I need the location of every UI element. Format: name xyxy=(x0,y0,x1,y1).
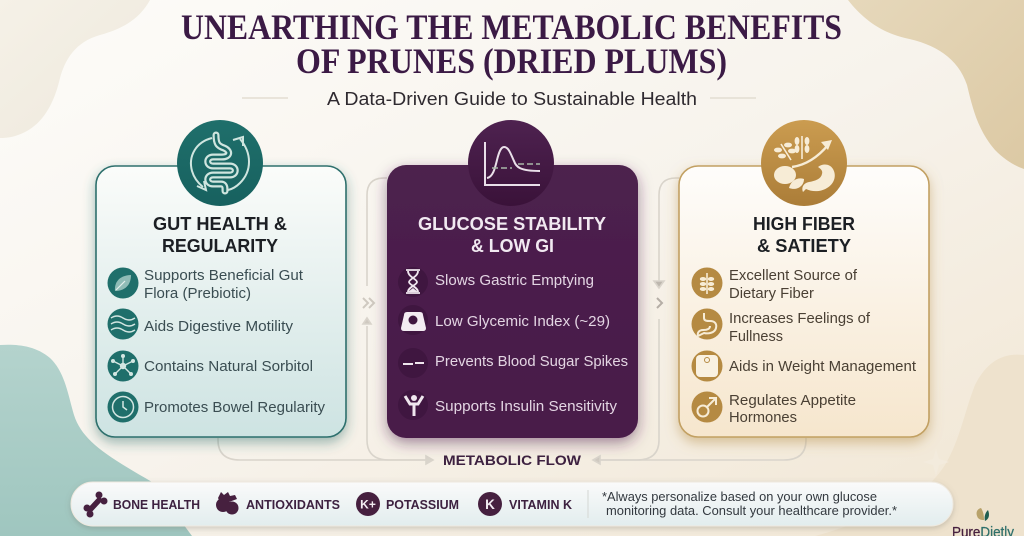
potassium: POTASSIUM xyxy=(386,497,459,512)
item: glycemic index xyxy=(398,305,610,335)
item: appetite hormones: Regulates Appetite xyxy=(729,393,856,409)
panel: gut health xyxy=(96,120,346,437)
title xyxy=(181,7,842,81)
item: blood sugar spikes xyxy=(398,348,628,378)
item: sorbitol xyxy=(108,350,313,382)
subtitle: A Data-Driven Guide to Sustainable Health xyxy=(327,88,697,109)
item: weight management xyxy=(692,350,916,382)
heading: GUT HEALTH & xyxy=(153,213,287,234)
item: gastric emptying xyxy=(398,267,594,297)
antioxidants: ANTIOXIDANTS xyxy=(246,497,340,512)
vitamin k: K xyxy=(485,497,495,512)
heading xyxy=(153,213,287,256)
item: appetite hormones: Hormones xyxy=(729,410,797,426)
item: blood sugar spikes: Prevents Blood Sugar Spikes xyxy=(435,354,628,370)
heading: REGULARITY xyxy=(162,235,279,256)
icon: glucose curve xyxy=(468,120,554,206)
disclaimer note: monitoring data. Consult your healthcare provider.* xyxy=(606,504,897,518)
item: motility: Aids Digestive Motility xyxy=(144,319,294,335)
panel: high fiber xyxy=(679,120,929,437)
icon: fiber and stomach xyxy=(761,120,847,206)
item: insulin sensitivity xyxy=(398,390,618,420)
item: glycemic index: Low Glycemic Index (~29) xyxy=(435,314,610,330)
heading: & LOW GI xyxy=(471,235,554,256)
potassium: K+ xyxy=(360,498,376,512)
item: fullness: Increases Feelings of xyxy=(729,311,871,327)
item: dietary fiber: Dietary Fiber xyxy=(729,286,814,302)
potassium xyxy=(356,492,459,516)
item: regularity: Promotes Bowel Regularity xyxy=(144,400,326,416)
item: gut flora: Supports Beneficial Gut xyxy=(144,268,303,284)
item: sorbitol: Contains Natural Sorbitol xyxy=(144,359,313,375)
item: weight management: Aids in Weight Management xyxy=(729,359,916,375)
heading: GLUCOSE STABILITY xyxy=(418,213,607,234)
item: motility xyxy=(108,308,294,340)
heading: & SATIETY xyxy=(757,235,852,256)
icon: gut xyxy=(177,120,263,206)
bone health: BONE HEALTH xyxy=(113,497,200,512)
item: fullness: Fullness xyxy=(729,329,783,345)
disclaimer note: *Always personalize based on your own glucose xyxy=(602,490,877,504)
metabolic flow connectors xyxy=(218,178,806,464)
item: gastric emptying: Slows Gastric Emptying xyxy=(435,273,594,289)
vitamin k: VITAMIN K xyxy=(509,497,573,512)
item: regularity xyxy=(108,392,326,422)
logo xyxy=(952,508,1015,536)
item: appetite hormones xyxy=(692,392,856,426)
heading: HIGH FIBER xyxy=(753,213,855,234)
heading xyxy=(418,213,607,256)
item: gut flora: Flora (Prebiotic) xyxy=(144,286,251,302)
heading xyxy=(753,213,855,256)
item: dietary fiber: Excellent Source of xyxy=(729,268,858,284)
item: fullness xyxy=(692,308,871,345)
item: dietary fiber xyxy=(692,268,858,302)
metabolic flow label: METABOLIC FLOW xyxy=(443,453,581,468)
vitamin k xyxy=(478,492,573,516)
title: UNEARTHING THE METABOLIC BENEFITS xyxy=(181,7,842,47)
title: OF PRUNES (DRIED PLUMS) xyxy=(296,41,727,81)
panel: glucose stability xyxy=(387,120,638,438)
item: insulin sensitivity: Supports Insulin Sensitivity xyxy=(435,399,618,415)
bone health xyxy=(84,492,200,518)
item: gut flora xyxy=(108,268,303,302)
disclaimer note xyxy=(602,490,897,518)
antioxidants xyxy=(216,492,340,514)
bottom bar xyxy=(71,482,953,526)
